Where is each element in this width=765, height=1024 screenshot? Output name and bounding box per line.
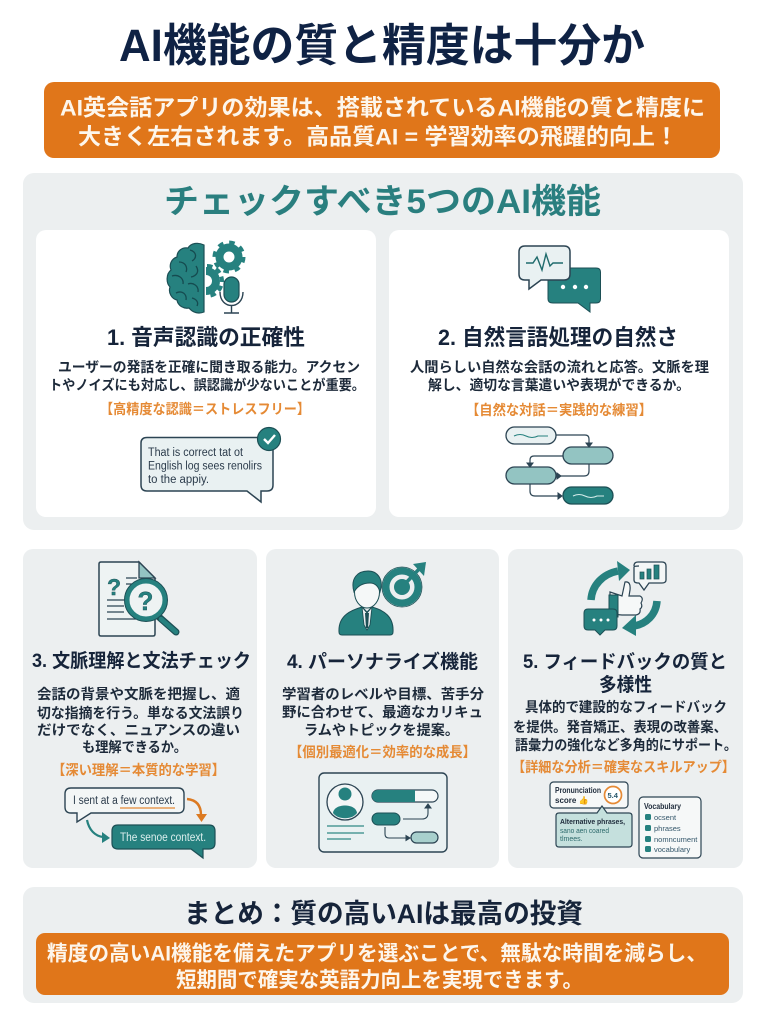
card 1: speech recognition	[36, 230, 376, 517]
title: AI機能の質と精度は十分か	[119, 20, 645, 71]
description: を提供。発音矯正、表現の改善案、	[513, 719, 727, 735]
description	[37, 686, 244, 755]
feedback score cards: Pronunciation	[555, 786, 601, 795]
summary banner: 精度の高いAI機能を備えたアプリを選ぶことで、無駄な時間を減らし、	[47, 942, 707, 966]
intro banner	[44, 82, 720, 158]
feedback score cards: sano aen coared	[560, 828, 609, 835]
card heading	[523, 651, 727, 696]
key point tag: 【高精度な認識＝ストレスフリー】	[100, 401, 310, 417]
description: 人間らしい自然な会話の流れと応答。文脈を理	[410, 359, 709, 375]
intro banner: 大きく左右されます。高品質AI = 学習効率の飛躍的向上！	[78, 124, 678, 150]
panel: feature 3 context and grammar	[23, 549, 257, 868]
icon: chat bubbles	[519, 246, 600, 312]
description: 会話の背景や文脈を把握し、適	[37, 686, 240, 702]
feedback score cards: tlmees.	[560, 836, 583, 843]
icon: brain, gears and microphone	[167, 242, 244, 313]
profile dashboard	[319, 773, 447, 852]
correction bubbles: I sent at a few context.	[73, 795, 175, 807]
feedback score cards	[550, 782, 701, 858]
summary heading: まとめ：質の高いAIは最高の投資	[184, 899, 583, 929]
feedback score cards: vocabulary	[654, 845, 691, 854]
card heading: 多様性	[599, 674, 652, 696]
card heading: 1. 音声認識の正確性	[107, 325, 305, 350]
description: ラムやトピックを提案。	[304, 722, 459, 738]
card heading: 2. 自然言語処理の自然さ	[438, 325, 678, 350]
description	[49, 359, 365, 393]
speech bubble with check: That is correct tat ot	[148, 447, 244, 459]
speech bubble with check: to the appiy.	[148, 474, 209, 486]
panel: five AI features	[23, 173, 743, 530]
correction bubbles: The senoe context.	[120, 832, 206, 844]
key point tag: 【深い理解＝本質的な学習】	[52, 762, 225, 778]
description: 野に合わせて、最適なカリキュ	[282, 704, 483, 720]
card 2: natural language processing	[389, 230, 729, 517]
description: 切な指摘を行う。単なる文法誤り	[37, 705, 244, 721]
conversation flow diagram	[506, 427, 613, 504]
speech bubble with check: English log sees renolirs	[148, 460, 262, 472]
card heading: 4. パーソナライズ機能	[287, 650, 478, 673]
key point tag: 【詳細な分析＝確実なスキルアップ】	[512, 759, 735, 775]
key point tag: 【自然な対話＝実践的な練習】	[466, 402, 652, 418]
feedback score cards: score 👍	[555, 795, 589, 805]
card heading: 5. フィードバックの質と	[523, 651, 727, 673]
summary banner	[36, 933, 729, 995]
feedback score cards: phrases	[654, 824, 681, 833]
description	[410, 359, 709, 393]
key point tag: 【個別最適化＝効率的な成長】	[289, 744, 476, 760]
correction bubbles	[65, 788, 215, 858]
description: 具体的で建設的なフィードバック	[525, 699, 727, 715]
intro banner: AI英会話アプリの効果は、搭載されているAI機能の質と精度に	[60, 96, 705, 120]
icon: document with magnifier	[99, 562, 176, 636]
feedback score cards: Vocabulary	[644, 802, 681, 811]
summary banner: 短期間で確実な英語力向上を実現できます。	[176, 969, 583, 992]
feedback score cards: Alternative phrases,	[560, 817, 625, 826]
description: トやノイズにも対応し、誤認識が少ないことが重要。	[49, 377, 365, 393]
description: だけでなく、ニュアンスの違い	[37, 722, 240, 738]
card heading: 3. 文脈理解と文法チェック	[32, 650, 251, 672]
description: ユーザーの発話を正確に聞き取る能力。アクセン	[58, 359, 360, 375]
description	[513, 699, 737, 753]
icon: person with target	[339, 562, 426, 635]
description: も理解できるか。	[82, 739, 187, 755]
description	[282, 686, 484, 738]
description: 解し、適切な言葉遣いや表現ができるか。	[428, 377, 690, 393]
panel: summary	[23, 887, 743, 1003]
feedback score cards: 5.4	[608, 791, 619, 800]
description: 語彙力の強化など多角的にサポート。	[515, 737, 737, 753]
section heading: チェックすべき5つのAI機能	[164, 183, 601, 221]
panel: feature 4 personalization	[266, 549, 499, 868]
speech bubble with check	[141, 428, 280, 502]
icon: document with magnifier: ?	[107, 574, 121, 600]
description: 学習者のレベルや目標、苦手分	[282, 686, 484, 702]
feedback score cards: ocsent	[654, 813, 677, 822]
feedback score cards: nomncument	[654, 835, 698, 844]
icon: feedback loop with thumbs up	[584, 561, 666, 636]
panel: feature 5 feedback	[508, 549, 743, 868]
icon: document with magnifier: ?	[138, 586, 153, 616]
